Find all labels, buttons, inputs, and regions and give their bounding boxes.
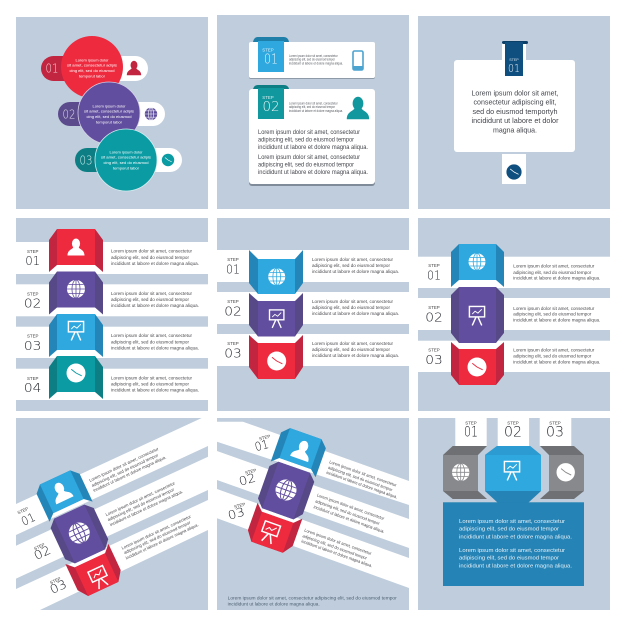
card: step 01: incididunt ut labore et dolore magna aliqua. [289, 61, 343, 65]
text block: Lorem ipsum dolor sit amet, consectetur [459, 548, 565, 554]
step descriptions: Lorem ipsum dolor sit amet, consectetur [111, 333, 193, 338]
step descriptions [312, 257, 399, 358]
icon: globe [273, 477, 299, 503]
step 1 block [451, 244, 504, 287]
step descriptions: adipiscing elit, sed do eiusmod tempor [312, 305, 391, 310]
panel: three steps descending [217, 218, 409, 411]
footer text: incididunt ut labore et dolore magna aliqua. [228, 602, 320, 606]
step descriptions: Lorem ipsum dolor sit amet, consectetur [513, 264, 595, 268]
text block [443, 502, 584, 586]
step labels: 02 [224, 304, 242, 318]
white card: incididunt ut labore et dolor [472, 116, 559, 125]
step 1 block [49, 229, 103, 272]
step labels: 04 [24, 381, 41, 395]
step descriptions: Lorem ipsum dolor sit amet, consectetur [105, 480, 176, 517]
step descriptions [513, 264, 600, 364]
step labels: STEP [27, 249, 39, 254]
step labels: 01 [427, 268, 441, 282]
card: step 02: Lorem ipsum dolor sit amet, consectetur [258, 129, 360, 136]
step descriptions: incididunt ut labore et dolore magna aliqua. [111, 388, 199, 393]
step 3 block [245, 503, 302, 555]
navy ribbon: 01 [508, 62, 520, 75]
card: step 02 [249, 85, 375, 186]
icon: globe [65, 519, 93, 547]
step labels: 01 [253, 437, 270, 454]
step labels: 01 [19, 510, 38, 529]
step labels: STEP [27, 376, 39, 381]
step tabs: STEP [465, 420, 477, 426]
step 2 block [451, 287, 504, 343]
step labels: STEP [49, 576, 62, 585]
step 1 block [34, 467, 93, 522]
step 4 block [49, 356, 103, 399]
white card [454, 43, 575, 152]
step tabs: 02 [504, 425, 522, 441]
step labels: STEP [17, 506, 29, 515]
icon: phone [353, 51, 363, 70]
step labels: 03 [24, 339, 41, 353]
step 01 pills [41, 56, 148, 81]
step descriptions: adipiscing elit, sed do eiusmod tempor [111, 255, 190, 260]
step labels [224, 257, 242, 360]
step descriptions: Lorem ipsum dolor sit amet, consectetur [121, 514, 192, 551]
step descriptions: adipiscing elit, sed do eiusmod tempor [111, 339, 190, 344]
red circle: cing elit, sed do eiusmod [70, 69, 114, 73]
text block: incididunt ut labore et dolore magna aliqua. [459, 563, 572, 569]
step descriptions: incididunt ut labore et dolore magna aliqua. [109, 489, 184, 527]
card: step 01: STEP [262, 48, 274, 52]
blue block [485, 446, 541, 503]
step tabs [455, 418, 571, 446]
clock tab [502, 154, 526, 184]
purple circle [78, 82, 140, 144]
step labels [226, 434, 271, 523]
purple circle: Lorem ipsum dolor [92, 104, 126, 108]
red circle [61, 36, 123, 98]
step labels [425, 263, 443, 367]
red circle: temporut labor [79, 74, 106, 78]
card: step 02: Lorem ipsum dolor sit amet, consectetur [258, 154, 360, 161]
icon: person [290, 438, 314, 462]
card: step 01: Lorem ipsum dolor sit amet, consectetur [289, 54, 338, 58]
step descriptions: incididunt ut labore et dolore magna aliqua. [111, 303, 199, 308]
red circle: sit amet, consectetur adipis [67, 64, 117, 68]
step descriptions: Lorem ipsum dolor sit amet, consectetur [312, 341, 394, 346]
step descriptions: Lorem ipsum dolor sit amet, consectetur [111, 291, 193, 296]
step descriptions: Lorem ipsum dolor sit amet, consectetur [513, 306, 595, 311]
red circle: Lorem ipsum dolor [76, 58, 109, 62]
icon: person [48, 479, 74, 504]
step descriptions: incididunt ut labore et dolore magna aliqua. [301, 539, 373, 568]
step labels: 03 [226, 505, 246, 523]
panel: horizontal steps with text block [418, 418, 610, 610]
step tabs: 01 [464, 425, 478, 441]
footer text [228, 596, 397, 606]
step 3 block [451, 342, 504, 385]
text block: adipiscing elit, sed do eiusmod tempor [459, 527, 559, 533]
card: step 01: adipiscing elit, sed do eiusmod tempor [289, 58, 336, 62]
step descriptions: adipiscing elit, sed do eiusmod tempor [513, 270, 592, 275]
step labels: 02 [425, 310, 443, 324]
step 2 block [48, 502, 112, 566]
step labels: STEP [227, 257, 239, 262]
icon: globe [145, 108, 157, 120]
step descriptions: incididunt ut labore et dolore magna aliqua. [92, 455, 167, 493]
step descriptions: Lorem ipsum dolor sit amet, consectetur [312, 257, 394, 262]
panel: overlapping circles [16, 17, 208, 209]
step 3 block [249, 335, 303, 379]
step descriptions: adipiscing elit, sed do eiusmod tempor [312, 263, 391, 268]
step 02 number: 02 [62, 108, 76, 122]
teal circle: cing elit, sed do eiusmod [104, 161, 148, 165]
navy ribbon: STEP [509, 58, 519, 62]
step descriptions: adipiscing elit, sed do eiusmod tempor [513, 312, 592, 316]
step descriptions: adipiscing elit, sed do eiusmod tempor [513, 354, 592, 358]
card: step 01 [249, 37, 375, 79]
step descriptions: Lorem ipsum dolor sit amet, consectetur [513, 348, 595, 352]
panel: four vertical steps [16, 218, 208, 411]
step descriptions: incididunt ut labore et dolore magna aliqua. [326, 470, 398, 500]
panel: diagonal descending steps [217, 418, 409, 610]
card: step 01: 01 [264, 52, 278, 68]
step labels: 03 [48, 577, 69, 597]
step descriptions [301, 459, 398, 568]
grey block right [540, 446, 584, 499]
step labels: STEP [33, 542, 46, 551]
step labels [17, 506, 69, 597]
teal circle: sit amet, consectetur adipis [101, 156, 151, 160]
icon: board [259, 521, 281, 545]
step descriptions: adipiscing elit, sed do eiusmod tempor [315, 499, 381, 526]
navy ribbon [502, 41, 528, 76]
purple circle: sit amet, consectetur adipis [84, 110, 134, 114]
step descriptions [88, 446, 199, 561]
step descriptions: Lorem ipsum dolor sit amet, consectetur [88, 446, 160, 483]
card: step 02: STEP [262, 95, 274, 100]
step descriptions: adipiscing elit, sed do eiusmod tempor [312, 347, 391, 352]
step 2 block [249, 293, 303, 336]
card: step 02: incididunt ut labore et dolore magna aliqua. [258, 144, 368, 151]
step descriptions: adipiscing elit, sed do eiusmod tempor [91, 452, 159, 488]
step descriptions: Lorem ipsum dolor sit amet, consectetur [304, 528, 373, 556]
step tabs: STEP [507, 420, 519, 426]
step labels: STEP [233, 502, 246, 509]
step 03 number: 03 [80, 154, 92, 168]
white card: consectetur adipiscing elit, [474, 98, 556, 106]
step 2 block [255, 459, 317, 522]
step labels: 02 [237, 471, 257, 489]
step labels: 01 [25, 254, 40, 268]
card: step 02: adipiscing elit, sed do eiusmod tempor [289, 105, 336, 109]
icon: person [127, 61, 141, 75]
step 03 pills [75, 148, 182, 172]
step descriptions: incididunt ut labore et dolore magna aliqua. [313, 504, 385, 534]
white card: sed do eiusmod temportyh [472, 107, 558, 116]
panel: ribbon cards [217, 15, 409, 209]
step tabs: STEP [549, 420, 561, 426]
step descriptions [111, 248, 199, 393]
card: step 02: 02 [262, 100, 280, 115]
step descriptions: incididunt ut labore et dolore magna aliqua. [312, 311, 399, 316]
step labels: STEP [27, 334, 39, 339]
panel: single step card [418, 16, 610, 209]
step descriptions: incididunt ut labore et dolore magna aliqua. [111, 345, 199, 350]
step descriptions: adipiscing elit, sed do eiusmod tempor [302, 533, 368, 561]
text block: adipiscing elit, sed do eiusmod tempor [459, 556, 559, 562]
step 3 block [49, 314, 103, 357]
step labels [24, 249, 41, 395]
step labels: 03 [224, 346, 242, 360]
step descriptions: incididunt ut labore et dolore magna aliqua. [312, 353, 399, 358]
step labels: STEP [27, 291, 39, 296]
text block: Lorem ipsum dolor sit amet, consectetur [459, 519, 565, 525]
step descriptions: adipiscing elit, sed do eiusmod tempor [111, 382, 190, 387]
step descriptions: incididunt ut labore et dolore magna aliqua. [513, 360, 600, 364]
step 02 pills [58, 102, 165, 126]
step labels: STEP [227, 299, 239, 304]
grey block left [443, 446, 487, 499]
step labels: 03 [425, 353, 443, 367]
teal circle [95, 129, 157, 191]
step labels: 01 [226, 262, 240, 276]
icon: clock [162, 154, 174, 166]
step descriptions: Lorem ipsum dolor sit amet, consectetur [316, 493, 385, 521]
step descriptions: incididunt ut labore et dolore magna aliqua. [513, 318, 600, 322]
step descriptions: incididunt ut labore et dolore magna aliqua. [312, 269, 399, 274]
step descriptions: adipiscing elit, sed do eiusmod tempor [107, 487, 175, 522]
icon: board [88, 565, 111, 590]
step labels: 02 [24, 296, 41, 310]
step descriptions: adipiscing elit, sed do eiusmod tempor [327, 465, 394, 492]
footer text: Lorem ipsum dolor sit amet, consectetur adipiscing elit, sed do eiusmod tempor [228, 596, 397, 600]
step labels: 02 [32, 543, 53, 563]
purple circle: cing elit, sed do eiusmod [86, 115, 132, 119]
step labels: STEP [244, 468, 257, 475]
step descriptions: Lorem ipsum dolor sit amet, consectetur [312, 299, 394, 304]
card: step 02: Lorem ipsum dolor sit amet, consectetur [289, 101, 338, 105]
step labels: STEP [428, 263, 440, 268]
step descriptions: incididunt ut labore et dolore magna aliqua. [513, 276, 600, 280]
step labels: STEP [428, 348, 440, 352]
step descriptions: incididunt ut labore et dolore magna aliqua. [125, 522, 199, 561]
step descriptions: adipiscing elit, sed do eiusmod tempor [111, 297, 190, 302]
step 1 block [249, 250, 303, 294]
teal circle: temporut labor [113, 166, 140, 170]
text block: incididunt ut labore et dolore magna aliqua. [459, 534, 572, 540]
step descriptions: Lorem ipsum dolor sit amet, consectetur [111, 248, 193, 254]
card: step 02: adipiscing elit, sed do eiusmod tempor [258, 161, 354, 168]
step labels: STEP [258, 434, 271, 441]
step 01 number: 01 [46, 62, 58, 76]
card: step 02: incididunt ut labore et dolore magna aliqua. [289, 109, 343, 113]
step 3 block [65, 544, 125, 599]
card: step 02: adipiscing elit, sed do eiusmod tempor [258, 136, 354, 143]
step descriptions: Lorem ipsum dolor sit amet, consectetur [111, 375, 193, 380]
step descriptions: incididunt ut labore et dolore magna aliqua. [111, 261, 199, 266]
white card: magna aliqua. [493, 126, 537, 134]
teal circle: Lorem ipsum dolor [110, 150, 143, 154]
step labels: STEP [227, 341, 239, 346]
step labels: STEP [428, 305, 440, 310]
icon: person [347, 97, 369, 119]
step descriptions: adipiscing elit, sed do eiusmod tempor [123, 520, 192, 555]
card: step 02: incididunt ut labore et dolore magna aliqua. [258, 169, 368, 176]
purple circle: temporut labor [96, 120, 123, 124]
panel: diagonal rising steps [16, 418, 208, 610]
step 1 block [271, 426, 328, 477]
white card: Lorem ipsum dolor sit amet, [472, 88, 558, 98]
step 2 block [49, 272, 103, 314]
panel: three steps with large middle [418, 218, 610, 411]
step tabs: 03 [546, 425, 564, 441]
step descriptions: Lorem ipsum dolor sit amet, consectetur [329, 459, 398, 488]
